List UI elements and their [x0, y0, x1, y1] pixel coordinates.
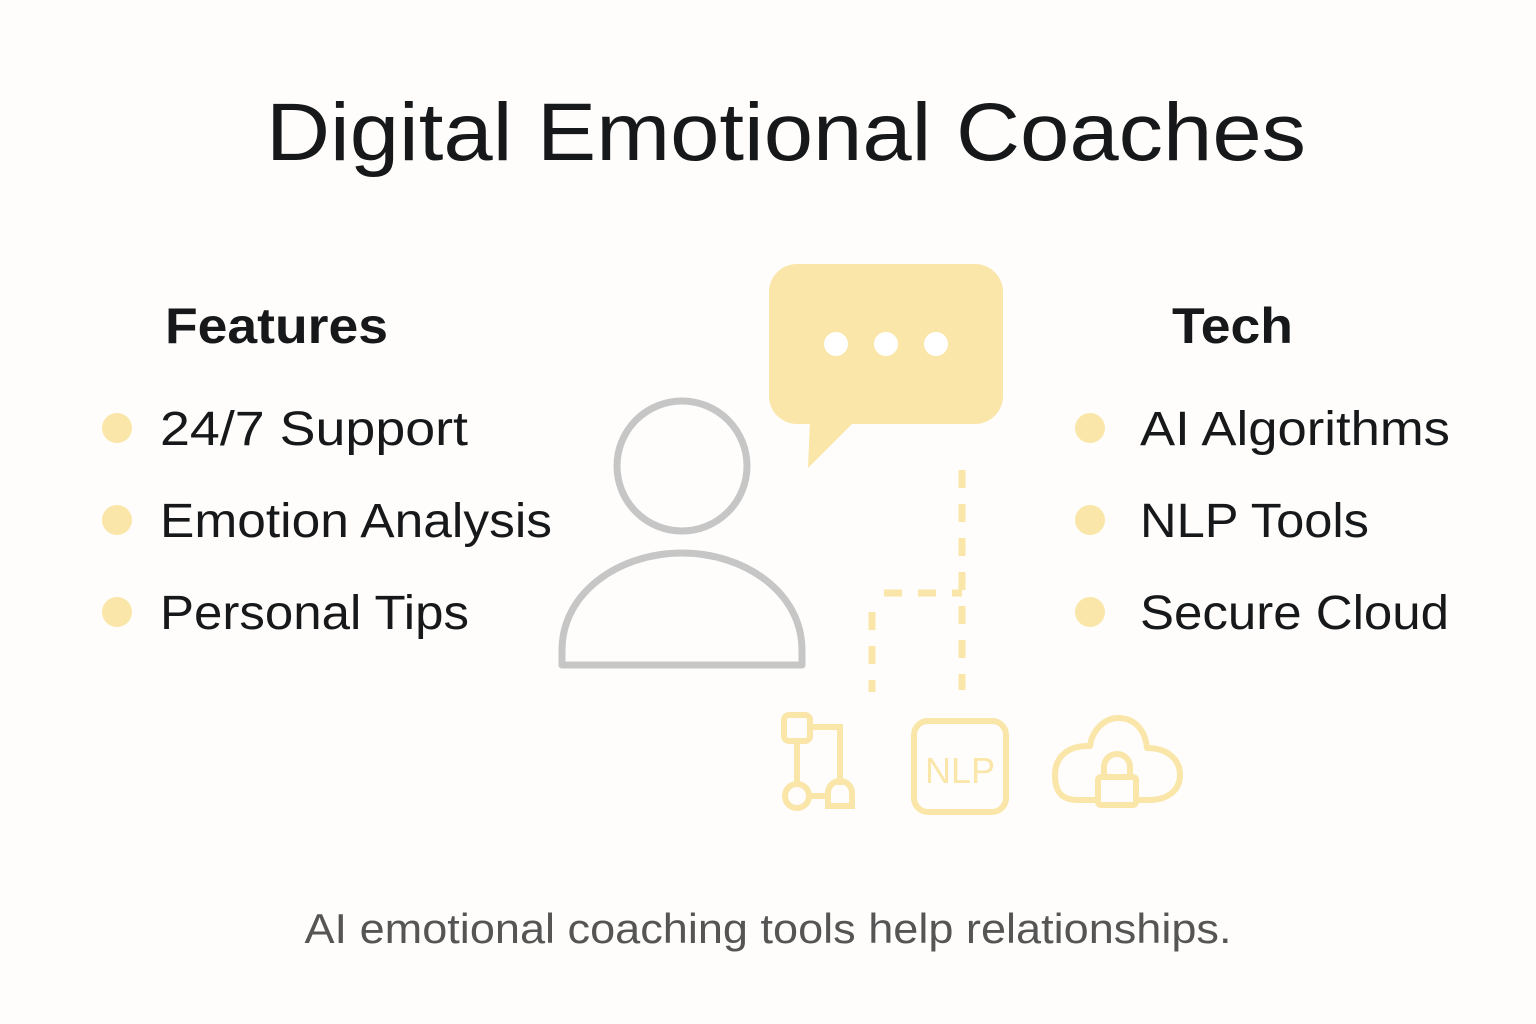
feature list	[102, 403, 552, 640]
feature list: Emotion Analysis	[160, 495, 552, 548]
panel: tech	[1075, 298, 1450, 640]
feature list: Personal Tips	[160, 587, 469, 640]
icon: speech bubble	[769, 264, 1003, 468]
icon: NLP box: NLP	[925, 750, 995, 791]
heading: tech: Tech	[1172, 298, 1293, 354]
tech list: NLP Tools	[1140, 495, 1369, 548]
icon: person	[562, 401, 802, 665]
footer caption: AI emotional coaching tools help relationships.	[304, 905, 1232, 952]
tech list	[1075, 403, 1450, 640]
tech list: Secure Cloud	[1140, 587, 1449, 640]
icon: secure cloud	[1055, 718, 1180, 805]
icon: NLP box	[914, 721, 1006, 812]
feature list: 24/7 Support	[160, 403, 468, 456]
tech list: AI Algorithms	[1140, 403, 1450, 456]
icon: algorithm flowchart	[784, 715, 852, 808]
connector lines	[872, 470, 962, 692]
panel: features	[102, 298, 552, 640]
heading: features: Features	[165, 298, 388, 354]
title: Digital Emotional Coaches	[266, 87, 1306, 178]
